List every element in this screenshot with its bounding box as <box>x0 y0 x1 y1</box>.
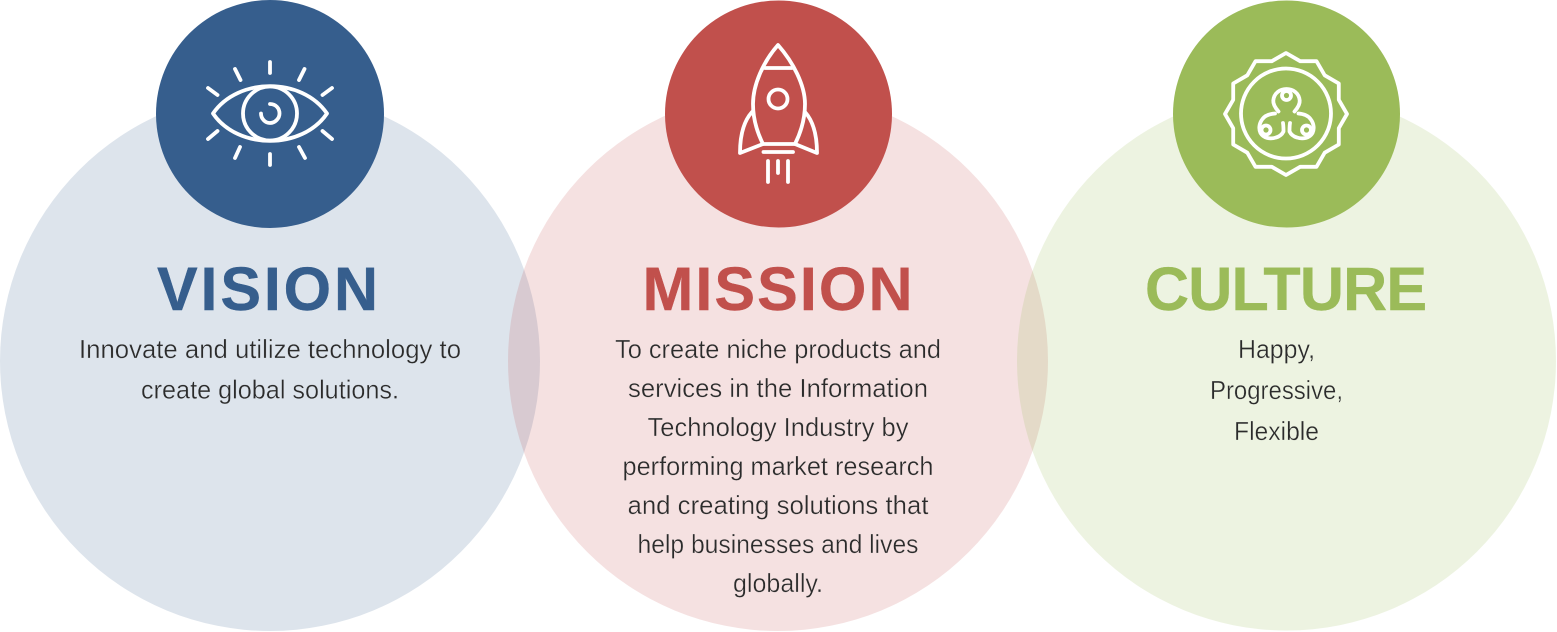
text block: mission statement: Technology Industry by <box>648 412 908 442</box>
culture badge circle <box>1173 0 1400 228</box>
text block: mission statement: help businesses and lives <box>638 529 918 559</box>
text block: vision statement: Innovate and utilize technology to <box>79 334 461 364</box>
icon: rocket <box>740 45 817 182</box>
mission badge circle <box>665 0 892 228</box>
text block: vision statement: create global solutions. <box>141 374 399 404</box>
vision badge circle <box>156 0 384 228</box>
text block: culture statement: Happy, <box>1238 334 1315 364</box>
text block: mission statement: performing market research <box>622 451 934 481</box>
heading: MISSION: MISSION <box>642 255 912 323</box>
text block: culture statement: Flexible <box>1234 416 1319 446</box>
text block: mission statement: and creating solutions that <box>628 490 929 520</box>
text block: mission statement: globally. <box>733 568 823 598</box>
text block: vision statement <box>79 334 461 404</box>
text block: mission statement: To create niche products and <box>615 334 941 364</box>
panel: vision large circle <box>0 91 540 631</box>
panel: mission large circle <box>508 91 1048 631</box>
heading: VISION: VISION <box>157 255 378 323</box>
text block: mission statement: services in the Information <box>628 373 928 403</box>
icon: eye <box>208 62 332 165</box>
text block: culture statement: Progressive, <box>1210 375 1343 405</box>
heading: CULTURE: CULTURE <box>1145 255 1427 323</box>
panel: culture large circle <box>1017 92 1556 630</box>
text block: mission statement <box>615 334 941 598</box>
icon: seal with triskele <box>1225 53 1347 175</box>
text block: culture statement <box>1210 334 1343 446</box>
